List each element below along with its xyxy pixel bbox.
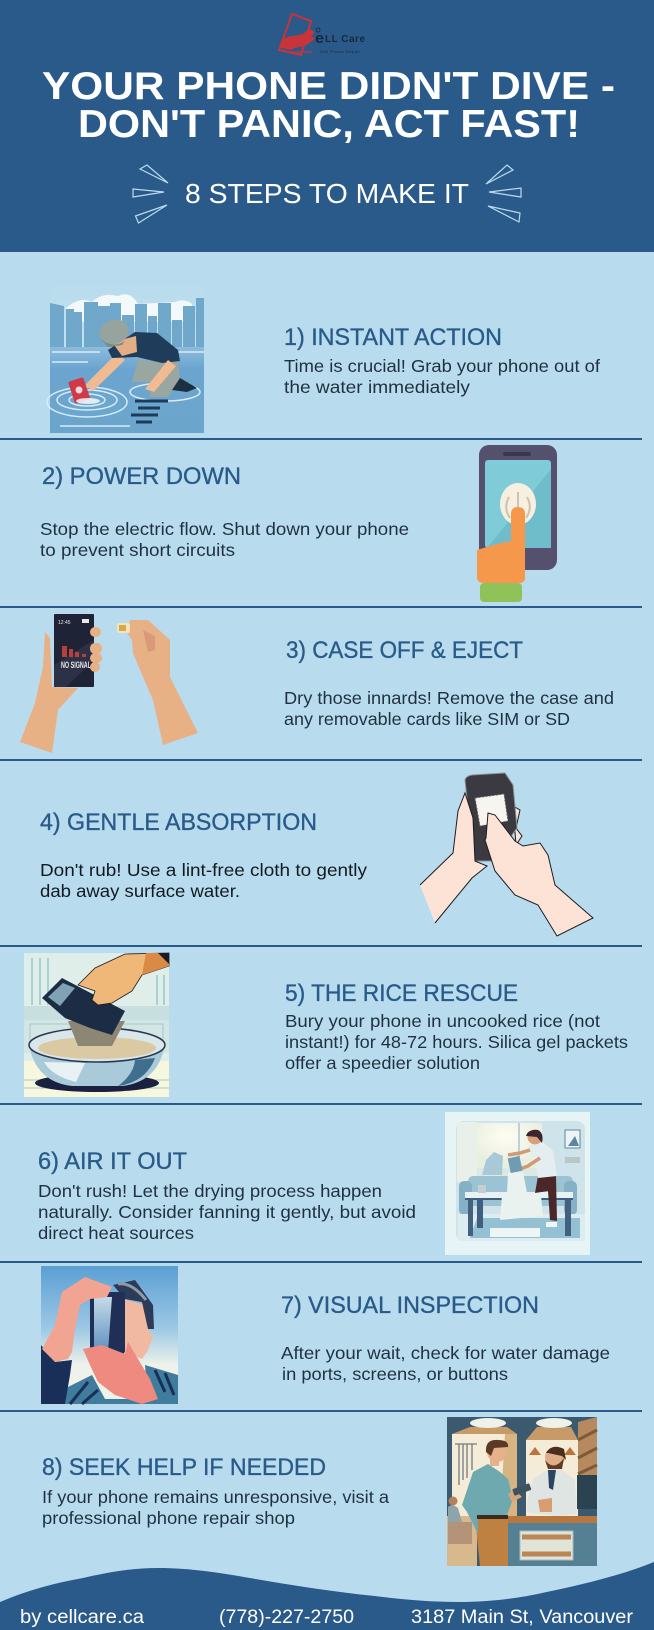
title: DON'T PANIC, ACT FAST! [78, 103, 580, 146]
panel: step 6 [38, 1112, 590, 1255]
divider [0, 606, 642, 608]
text block [40, 860, 367, 901]
illustration: hands dabbing phone with cloth [420, 773, 593, 936]
heading: 7) VISUAL INSPECTION [281, 1292, 539, 1319]
text block: Don't rub! Use a lint-free cloth to gently [40, 860, 367, 880]
icon: right sparks [486, 165, 521, 222]
panel: step 8 [42, 1417, 597, 1566]
panel: step 3 [20, 614, 614, 753]
panel: step 4 [40, 773, 593, 936]
divider [0, 438, 642, 440]
footer contact text: 3187 Main St, Vancouver [411, 1606, 634, 1628]
text block: Stop the electric flow. Shut down your phone [40, 519, 409, 539]
text block [284, 356, 600, 397]
text block: in ports, screens, or buttons [282, 1364, 508, 1384]
icon: phone with power button [477, 445, 557, 602]
text block [285, 1011, 628, 1073]
illustration: man drying phone in living room [445, 1112, 590, 1255]
title: YOUR PHONE DIDN'T DIVE - [42, 65, 615, 108]
heading: 3) CASE OFF & EJECT [286, 637, 523, 664]
text block [281, 1343, 610, 1384]
text block: professional phone repair shop [42, 1508, 295, 1528]
header panel [0, 0, 654, 252]
footer wave [0, 1562, 654, 1630]
text block: If your phone remains unresponsive, visit a [42, 1487, 389, 1507]
heading: 5) THE RICE RESCUE [285, 980, 518, 1007]
text block: Don't rush! Let the drying process happen [38, 1181, 382, 1201]
panel: step 1 [47, 280, 600, 433]
divider [0, 759, 642, 761]
text block: instant!) for 48-72 hours. Silica gel packets [285, 1032, 628, 1052]
divider [0, 945, 642, 947]
text block: the water immediately [284, 377, 470, 397]
heading: 1) INSTANT ACTION [284, 324, 502, 351]
footer contact text: by cellcare.ca [20, 1606, 144, 1628]
text block [42, 1487, 389, 1528]
icon: left sparks [133, 165, 168, 223]
heading: 4) GENTLE ABSORPTION [40, 809, 317, 836]
panel: step 7 [41, 1266, 610, 1404]
text block [40, 519, 409, 560]
text block [38, 1181, 416, 1243]
text block: to prevent short circuits [40, 540, 235, 560]
illustration: customer at repair shop [447, 1417, 597, 1566]
text block: Dry those innards! Remove the case and [284, 688, 614, 708]
illustration: hands with phone and SIM card: NO SIGNAL [61, 660, 91, 670]
illustration: phone buried in rice bowl [24, 953, 169, 1097]
footer contact text [20, 1606, 634, 1628]
text block: naturally. Consider fanning it gently, but avoid [38, 1202, 416, 1222]
text block: Time is crucial! Grab your phone out of [284, 356, 600, 376]
text block: After your wait, check for water damage [281, 1343, 610, 1363]
text block: direct heat sources [38, 1223, 194, 1243]
panel: step 2 [40, 445, 557, 602]
illustration: man grabbing phone from water [47, 280, 204, 433]
text block: offer a speedier solution [285, 1053, 480, 1073]
heading: 2) POWER DOWN [42, 463, 241, 490]
heading: 8) SEEK HELP IF NEEDED [42, 1454, 326, 1481]
panel: step 5 [24, 953, 628, 1097]
logo: LL Care [325, 34, 365, 45]
illustration: hands with phone and SIM card [20, 614, 198, 753]
logo: Cell Phone Repair [320, 49, 361, 54]
divider [0, 1103, 642, 1105]
subtitle: 8 STEPS TO MAKE IT [185, 178, 469, 209]
logo: e [315, 30, 324, 47]
divider [0, 1261, 642, 1263]
text block [284, 688, 614, 729]
illustration: man inspecting phone [41, 1266, 178, 1404]
illustration: hands with phone and SIM card: 12:45 [58, 620, 71, 626]
text block: any removable cards like SIM or SD [284, 709, 570, 729]
divider [0, 1410, 642, 1412]
logo [279, 14, 365, 55]
heading: 6) AIR IT OUT [38, 1148, 187, 1175]
text block: dab away surface water. [40, 881, 240, 901]
title [42, 65, 615, 146]
footer contact text: (778)-227-2750 [219, 1606, 354, 1628]
text block: Bury your phone in uncooked rice (not [285, 1011, 600, 1031]
